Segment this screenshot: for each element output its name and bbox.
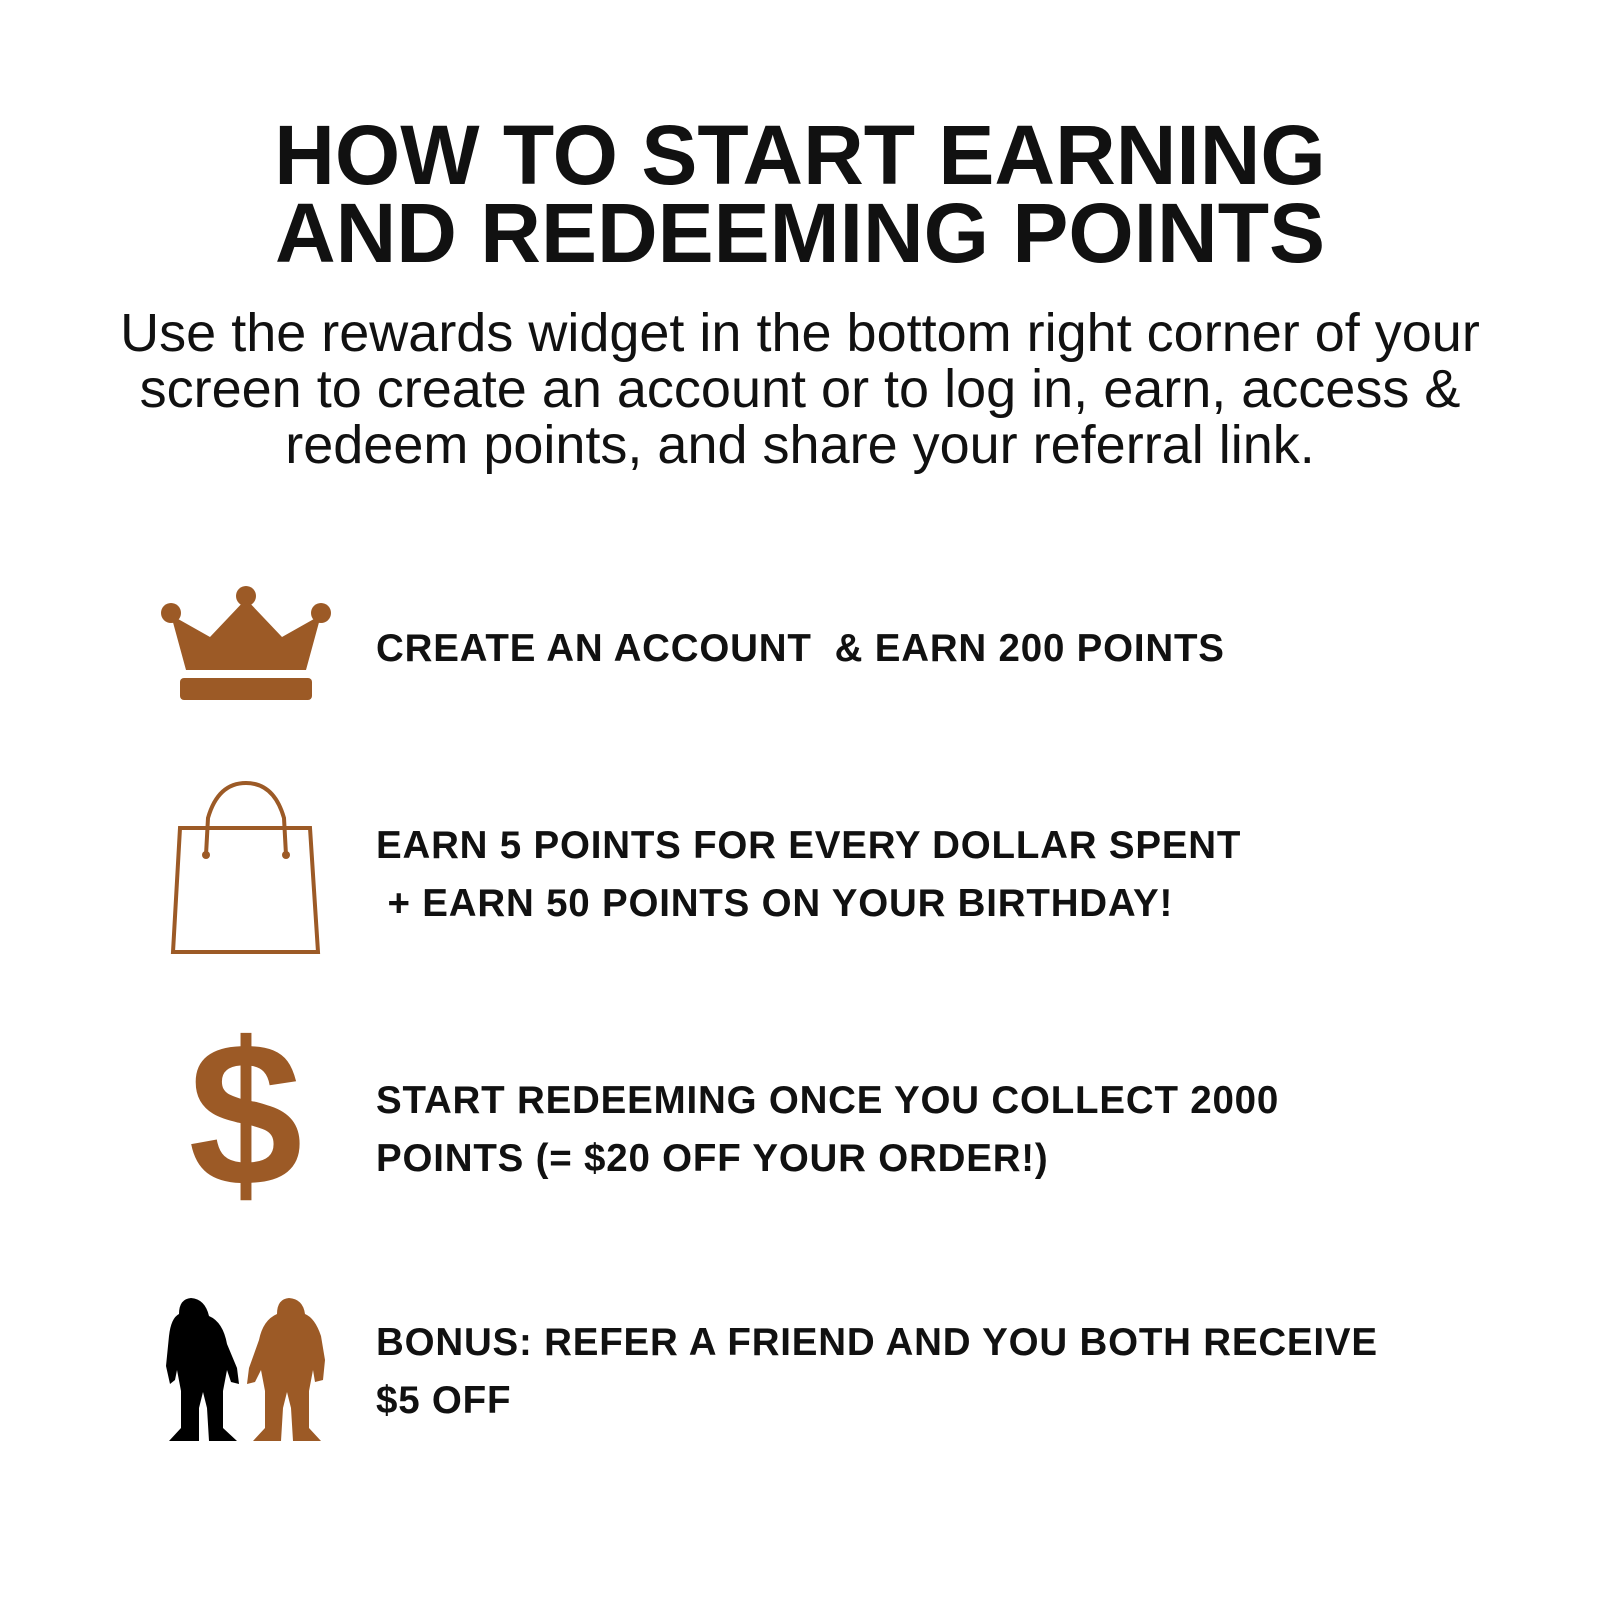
item 3 text: [376, 1079, 1279, 1180]
item 4 text: [376, 1321, 1378, 1422]
item 3 text: POINTS (= $20 OFF YOUR ORDER!): [376, 1137, 1049, 1180]
item 2 text: + EARN 50 POINTS ON YOUR BIRTHDAY!: [387, 882, 1173, 925]
title: [274, 108, 1326, 280]
item 1 text: CREATE AN ACCOUNT & EARN 200 POINTS: [376, 627, 1225, 670]
subtitle: screen to create an account or to log in, earn, access &: [140, 359, 1460, 419]
icon: shopping bag: [170, 781, 320, 954]
subtitle: redeem points, and share your referral link.: [285, 415, 1315, 475]
item 4 text: $5 OFF: [376, 1379, 511, 1422]
subtitle: Use the rewards widget in the bottom right corner of your: [120, 303, 1480, 363]
item 2 text: [376, 824, 1241, 925]
item 4 text: BONUS: REFER A FRIEND AND YOU BOTH RECEIVE: [376, 1321, 1378, 1364]
item 3 text: START REDEEMING ONCE YOU COLLECT 2000: [376, 1079, 1279, 1122]
subtitle: [120, 303, 1480, 475]
icon: dollar: $: [188, 1000, 302, 1229]
title: HOW TO START EARNING: [274, 108, 1326, 202]
item 2 text: EARN 5 POINTS FOR EVERY DOLLAR SPENT: [376, 824, 1241, 867]
icon: crown: [161, 586, 331, 700]
icon: two bigfoots: [166, 1298, 325, 1441]
title: AND REDEEMING POINTS: [275, 186, 1325, 280]
